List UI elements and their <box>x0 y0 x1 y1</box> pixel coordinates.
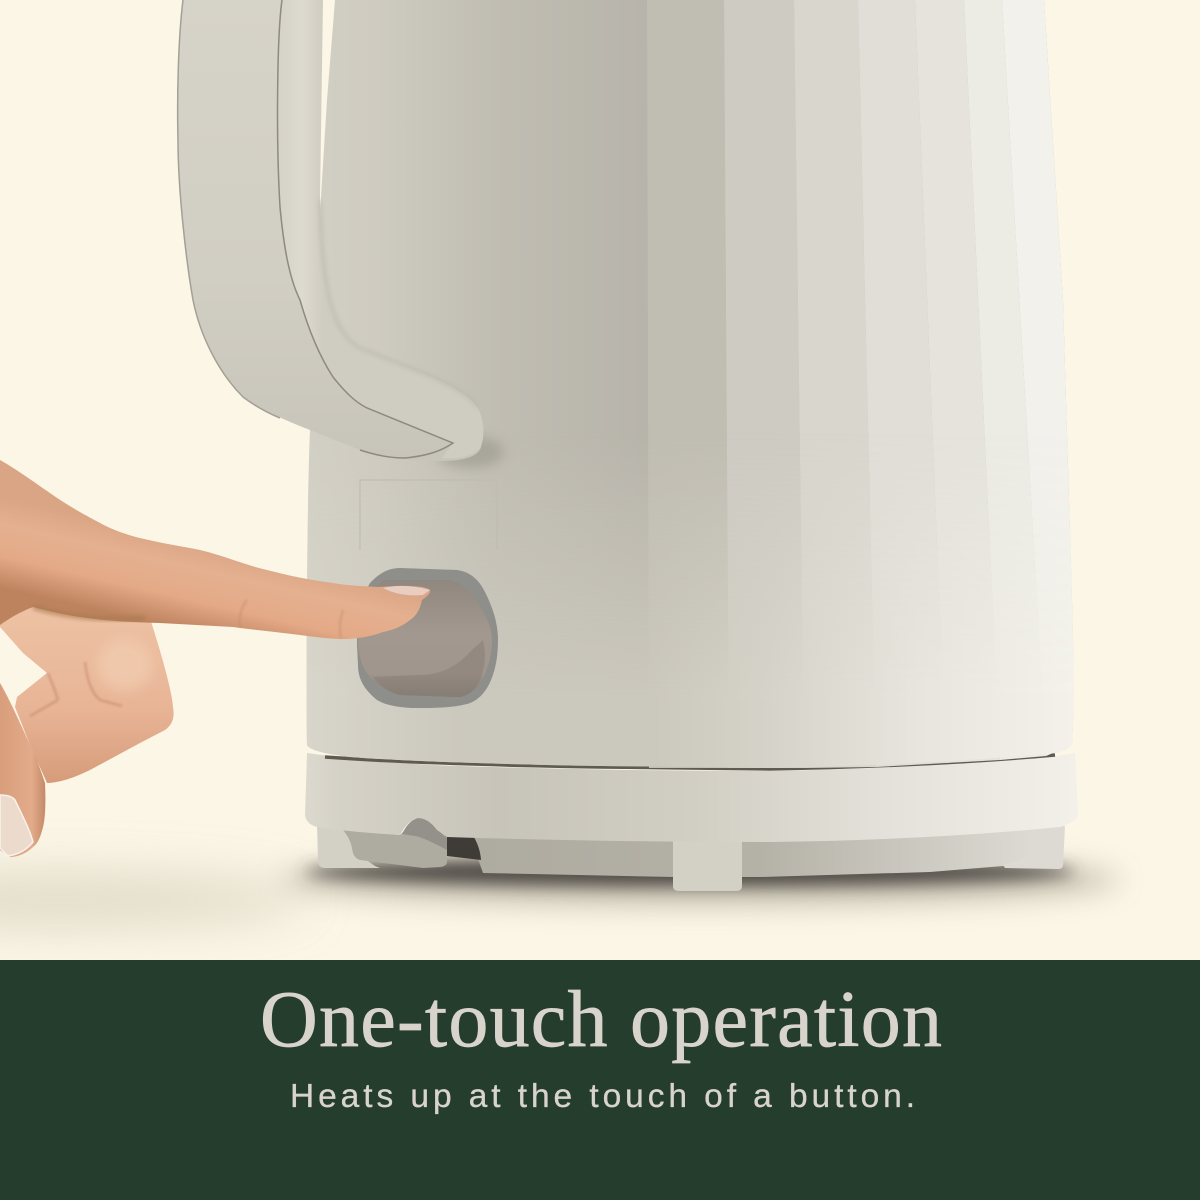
shadows on surface <box>0 856 1120 928</box>
label recess on body <box>360 480 497 550</box>
bottom plate <box>470 825 1040 877</box>
index finger and palm <box>0 460 430 639</box>
knuckle highlights <box>97 639 153 691</box>
flutes <box>647 0 1074 768</box>
thumb <box>0 683 45 857</box>
kettle base <box>305 753 1078 891</box>
subtitle: Heats up at the touch of a button. <box>290 1078 915 1115</box>
green footer band <box>0 960 1200 1200</box>
centre foot <box>673 840 742 891</box>
shadow under handle tip <box>436 436 504 468</box>
dark cord gap <box>445 834 481 860</box>
rear handle <box>178 0 481 461</box>
dark seam <box>325 755 1055 769</box>
kettle body <box>307 0 1074 769</box>
body shell <box>307 0 1074 768</box>
hand pressing button <box>0 460 430 857</box>
knuckle creases <box>30 662 122 716</box>
curled fingers <box>0 600 174 783</box>
right foot <box>1003 826 1065 869</box>
background <box>0 0 1200 960</box>
front handle <box>278 0 483 458</box>
index fingernail <box>383 586 430 595</box>
left foot <box>317 822 380 868</box>
base ring <box>305 753 1078 842</box>
power button <box>357 568 498 708</box>
cord notch shade <box>402 818 447 850</box>
cord block <box>343 817 447 868</box>
smooth lower body <box>344 544 1074 768</box>
title: One-touch operation <box>260 976 942 1064</box>
thumb nail <box>0 795 33 856</box>
finger joint creases <box>240 600 343 638</box>
palm fold shading <box>33 607 145 619</box>
